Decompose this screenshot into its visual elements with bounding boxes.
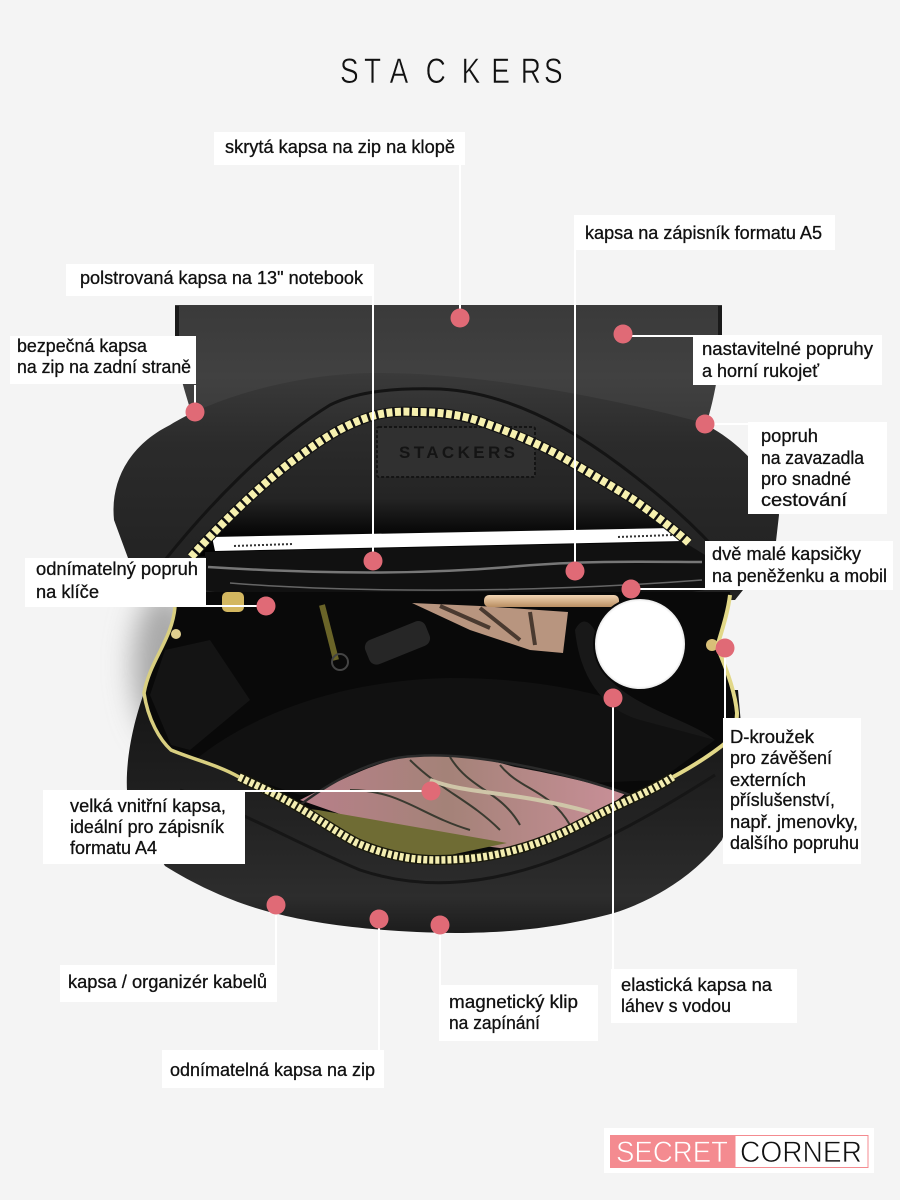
elastic pocket frill: [575, 622, 715, 740]
label: D-ring: příslušenství,: [730, 790, 835, 810]
label: magnetic clip: magnetický klip: [449, 992, 578, 1012]
label: magnetic clip: na zapínání: [449, 1013, 540, 1033]
inner lining above tablet: [191, 412, 689, 557]
label: luggage strap: cestování: [761, 490, 847, 510]
tablet edge: [212, 528, 684, 551]
marble notebook: [300, 755, 626, 850]
label: removable zip pocket: [162, 1050, 384, 1088]
label: luggage strap: pro snadné: [761, 469, 851, 489]
label: A5 notebook pocket: kapsa na zápisník formatu A5: [585, 223, 822, 243]
label: secure back pocket: [10, 336, 196, 384]
backpack illustration: [113, 305, 779, 933]
label: hidden zip pocket on flap: skrytá kapsa na zip na klopě: [225, 137, 455, 157]
logo: Secret Corner: [604, 1128, 874, 1173]
olive notebook edge: [298, 808, 507, 858]
title: brand name: STACKERS: [340, 51, 563, 91]
label: adjustable straps: [693, 335, 882, 385]
label: D-ring: dalšího popruhu: [730, 833, 859, 853]
label: D-ring: pro závěšení: [730, 748, 832, 768]
gold phone: [484, 595, 619, 607]
label: adjustable straps: nastavitelné popruhy: [702, 339, 873, 359]
left lining panel: [150, 640, 250, 750]
label: adjustable straps: a horní rukojeť: [702, 361, 819, 381]
lower zip teeth: [239, 777, 673, 860]
label: D-ring: D-kroužek: [730, 727, 815, 747]
label: cable organiser: kapsa / organizér kabelů: [68, 972, 267, 992]
large inner pocket: [195, 678, 715, 795]
label: two small pockets: [705, 541, 893, 590]
label: luggage strap: [748, 422, 887, 514]
D-ring and key clip hardware: [171, 592, 718, 651]
label: large inner pocket: ideální pro zápisník: [70, 817, 225, 837]
label: large inner pocket: [43, 790, 245, 864]
flap edge seams: [177, 306, 720, 340]
soft shadow behind bag: [133, 590, 197, 740]
label: two small pockets: dvě malé kapsičky: [712, 544, 861, 564]
brand patch: [377, 427, 535, 477]
lower zip thin side sections: [144, 595, 737, 777]
leader lines: [195, 165, 748, 1050]
label: removable key strap: odnímatelný popruh: [36, 559, 198, 579]
label: A5 notebook pocket: [574, 215, 835, 250]
shell rim stitching: [165, 389, 725, 560]
label: luggage strap: na zavazadla: [761, 448, 865, 468]
lower front shell: [127, 690, 745, 933]
label: two small pockets: na peněženku a mobil: [712, 566, 887, 586]
label: magnetic clip: [439, 985, 598, 1041]
pattern marks on notebook: [440, 606, 535, 645]
logo: Secret Corner: SECRET: [616, 1136, 728, 1169]
front shell rim line: [180, 775, 715, 883]
label: removable zip pocket: odnímatelná kapsa na zip: [170, 1060, 375, 1080]
label: large inner pocket: formatu A4: [70, 838, 157, 858]
main compartment interior: [144, 592, 737, 860]
brand patch: STACKERS: [399, 443, 515, 462]
back shell of the bag: [113, 373, 779, 607]
label: cable organiser: [60, 965, 277, 1002]
label: large inner pocket: velká vnitřní kapsa,: [70, 796, 226, 816]
pocket opening line: [300, 755, 630, 805]
label: removable key strap: [25, 558, 206, 607]
top zip teeth: [191, 412, 689, 557]
patterned notebook in upper pocket: [412, 603, 568, 653]
keys: [322, 605, 432, 670]
label: hidden zip pocket on flap: [214, 132, 465, 165]
label: secure back pocket: na zip na zadní straně: [17, 357, 191, 377]
label: padded notebook pocket: [66, 264, 374, 296]
label: secure back pocket: bezpečná kapsa: [17, 336, 148, 356]
label: elastic bottle pocket: elastická kapsa na: [621, 975, 773, 995]
front organiser panel: [205, 542, 705, 605]
label: elastic bottle pocket: láhev s vodou: [621, 996, 731, 1016]
label: elastic bottle pocket: [611, 969, 797, 1023]
label: removable key strap: na klíče: [36, 582, 99, 602]
label: luggage strap: popruh: [761, 426, 818, 446]
logo: Secret Corner: CORNER: [740, 1136, 862, 1169]
label: D-ring: externích: [730, 770, 806, 790]
top flap: [175, 305, 722, 425]
label: D-ring: [723, 718, 861, 864]
label: D-ring: např. jmenovky,: [730, 812, 858, 832]
callout markers: [186, 308, 734, 934]
label: padded notebook pocket: polstrovaná kapsa na 13" notebook: [80, 268, 364, 288]
white water bottle cap: [594, 598, 686, 690]
